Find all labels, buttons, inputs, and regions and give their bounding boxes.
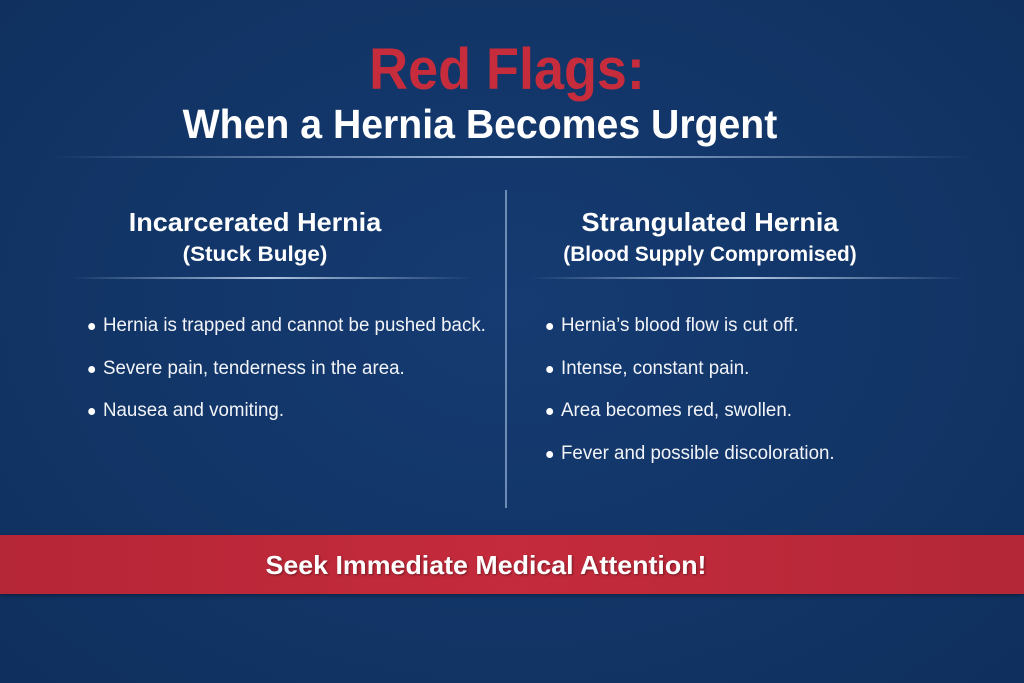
banner text: Seek Immediate Medical Attention! <box>265 550 706 580</box>
panel: incarcerated hernia <box>80 207 486 421</box>
heading: strangulated: Strangulated Hernia <box>582 207 838 237</box>
bullet list left <box>88 315 486 421</box>
subheading: blood supply: (Blood Supply Compromised) <box>563 243 857 266</box>
bullet list right: Area becomes red, swollen. <box>561 400 792 421</box>
subheading: stuck bulge: (Stuck Bulge) <box>183 243 327 266</box>
banner: seek medical attention <box>0 535 1024 594</box>
bullet list right <box>546 315 835 464</box>
bullet list right: Hernia’s blood flow is cut off. <box>561 315 799 336</box>
bullet list left: Hernia is trapped and cannot be pushed back. <box>103 315 486 336</box>
title: Red Flags: <box>369 37 645 102</box>
subtitle: When a Hernia Becomes Urgent <box>183 101 777 147</box>
bullet list left: Severe pain, tenderness in the area. <box>103 358 405 379</box>
heading: incarcerated: Incarcerated Hernia <box>129 207 381 237</box>
bullet list right: Fever and possible discoloration. <box>561 443 835 464</box>
bullet list left: Nausea and vomiting. <box>103 400 284 421</box>
bullet list right: Intense, constant pain. <box>561 358 749 379</box>
panel: strangulated hernia <box>542 207 954 464</box>
